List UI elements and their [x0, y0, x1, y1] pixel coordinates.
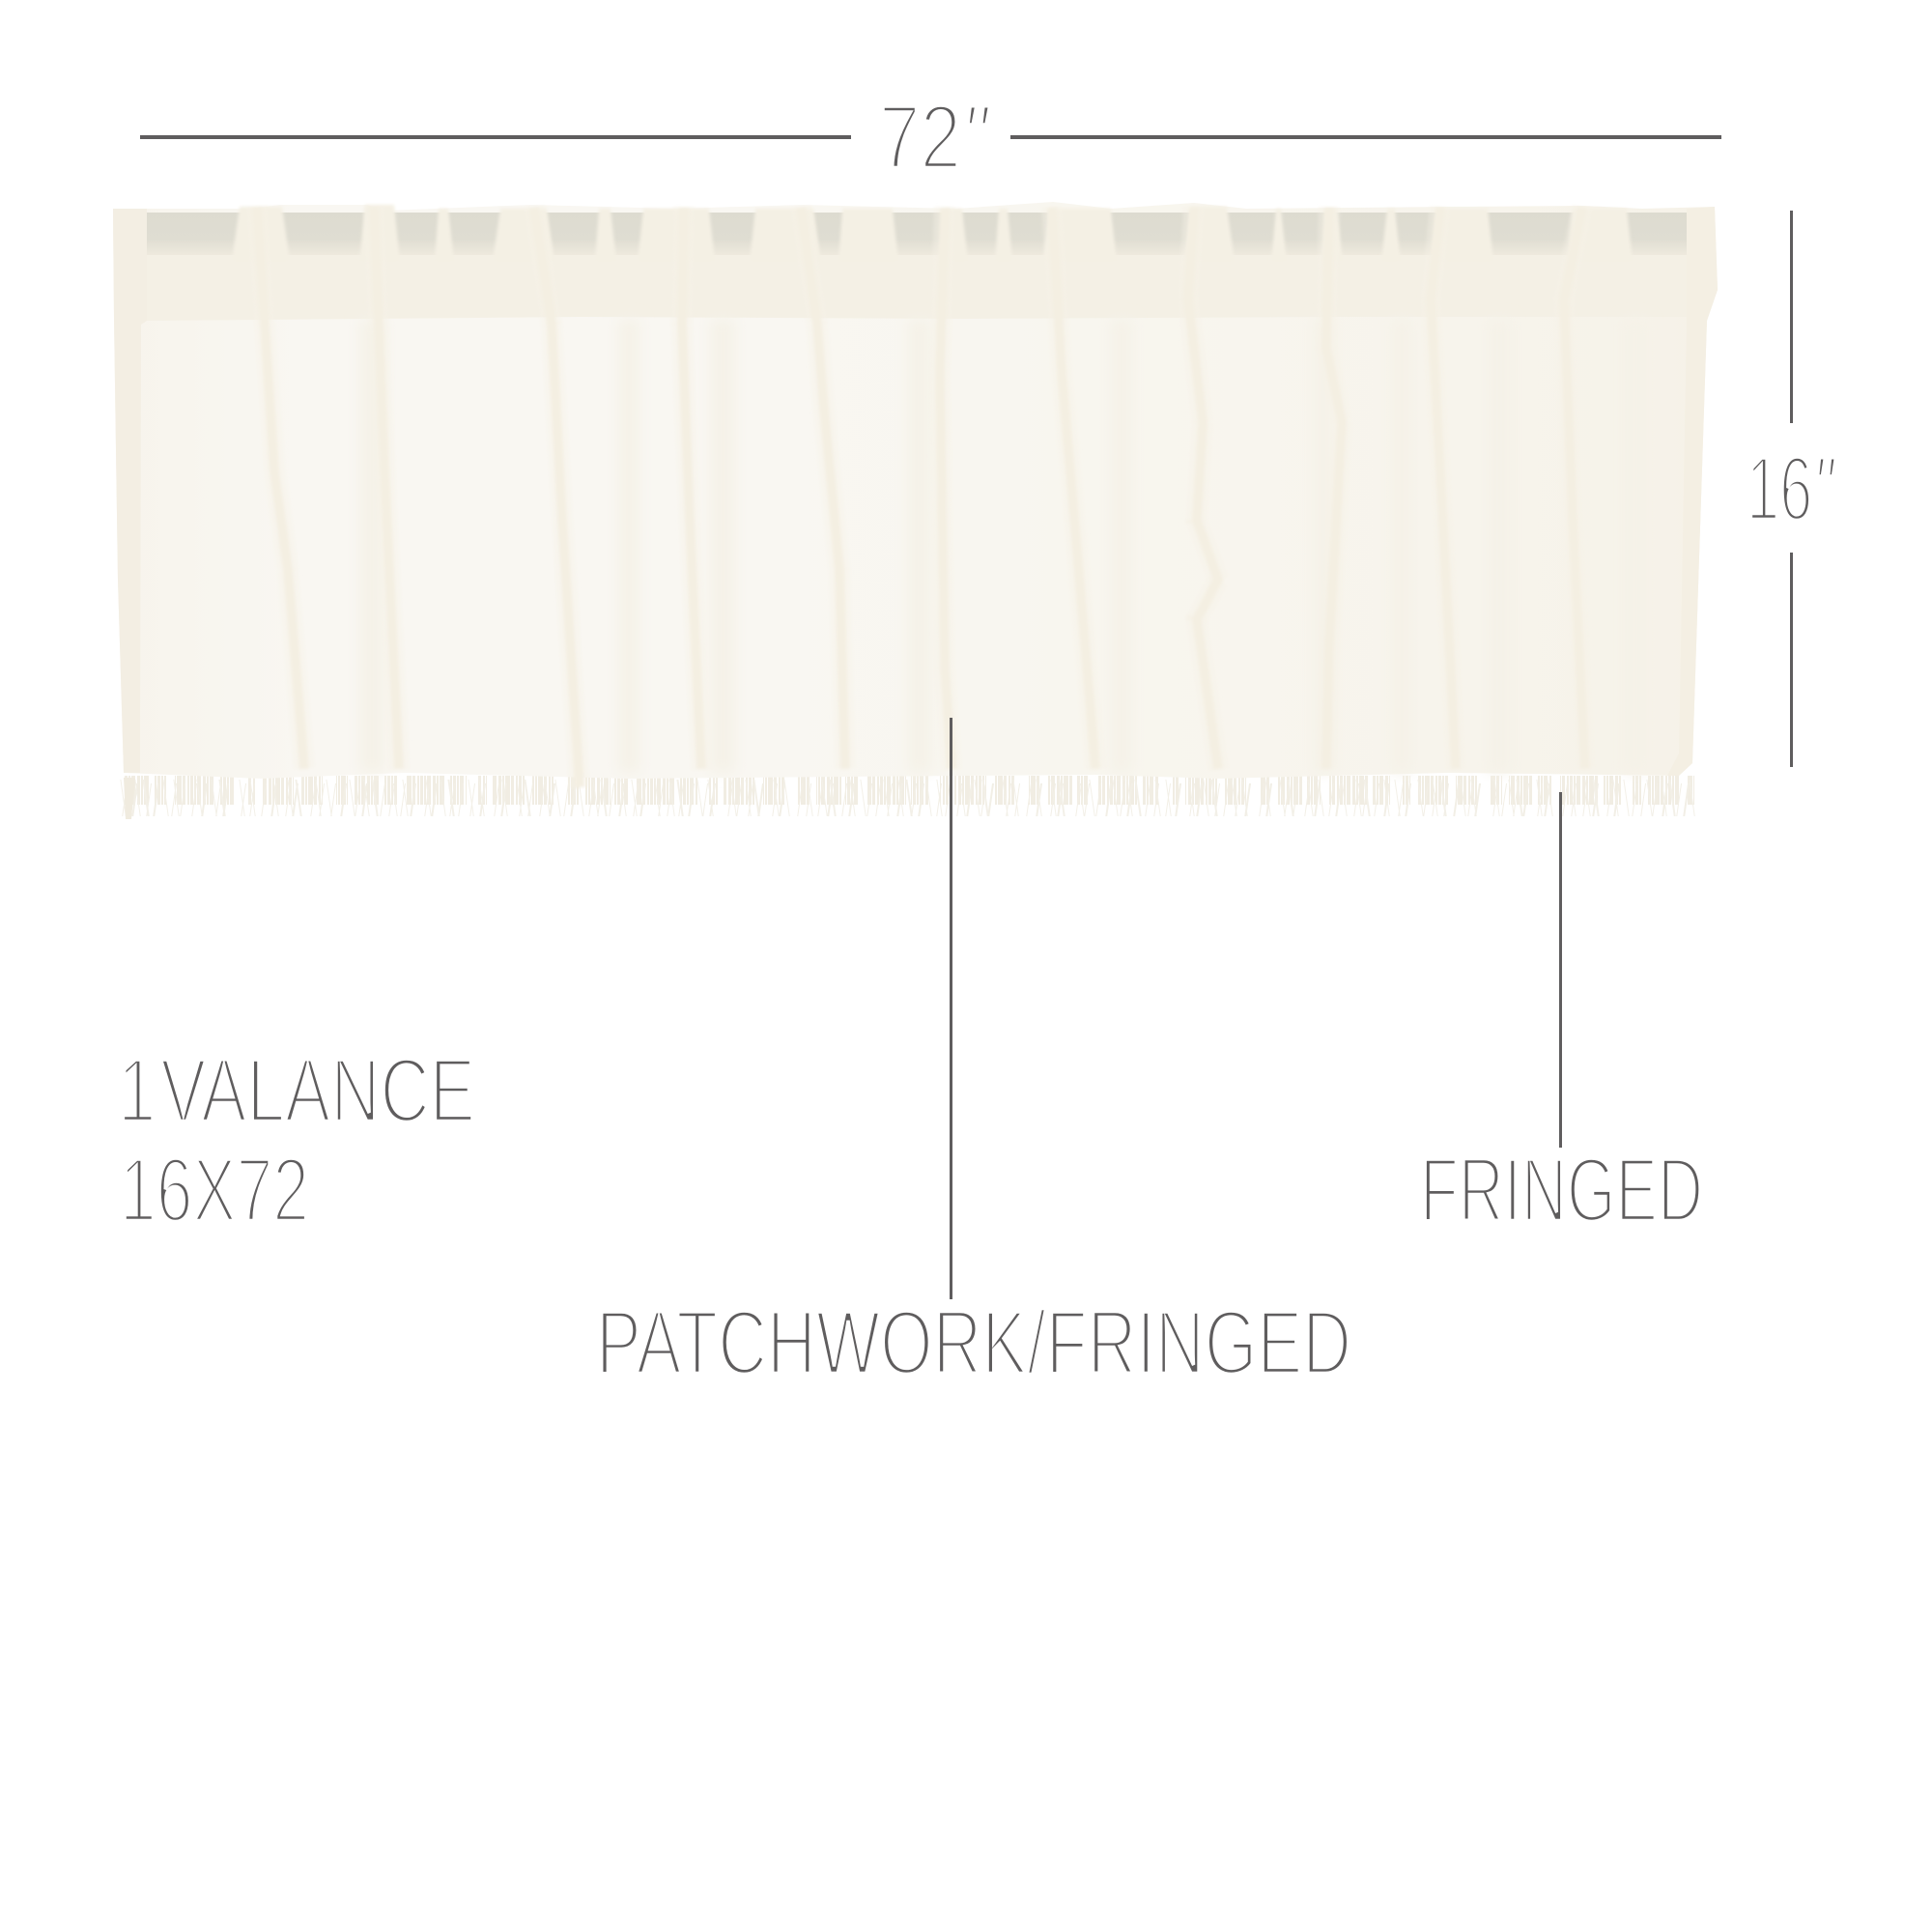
left side hem — [113, 209, 147, 773]
patchwork leader line — [950, 718, 952, 1299]
soft pleat folds — [359, 319, 1648, 773]
width line right — [1010, 135, 1721, 139]
height line top — [1790, 211, 1793, 423]
bottom fringe — [123, 778, 1695, 819]
rod pocket lower band — [147, 255, 1687, 321]
patchwork callout — [596, 718, 1351, 1393]
width dimension — [140, 86, 1721, 187]
patchwork label: PATCHWORK/FRINGED — [596, 1292, 1351, 1393]
right side hem — [1667, 207, 1718, 776]
height line bottom — [1790, 553, 1793, 767]
height dimension — [1747, 211, 1835, 767]
fringed label: FRINGED — [1420, 1139, 1703, 1240]
fringed callout — [1420, 792, 1703, 1240]
product info text — [118, 1039, 475, 1240]
valance count: 1 VALANCE — [118, 1039, 475, 1141]
fringed leader line — [1559, 792, 1562, 1148]
height label: 16" — [1747, 438, 1835, 539]
width label: 72" — [879, 86, 990, 187]
width line left — [140, 135, 851, 139]
fringed patchwork stripes — [257, 208, 1585, 787]
rod pocket shaded band — [147, 213, 1687, 257]
valance size: 16X72 — [120, 1139, 309, 1240]
curtain valance — [113, 202, 1718, 819]
gathered pleats over rod pocket — [232, 205, 1633, 261]
curtain fabric body — [113, 202, 1718, 779]
